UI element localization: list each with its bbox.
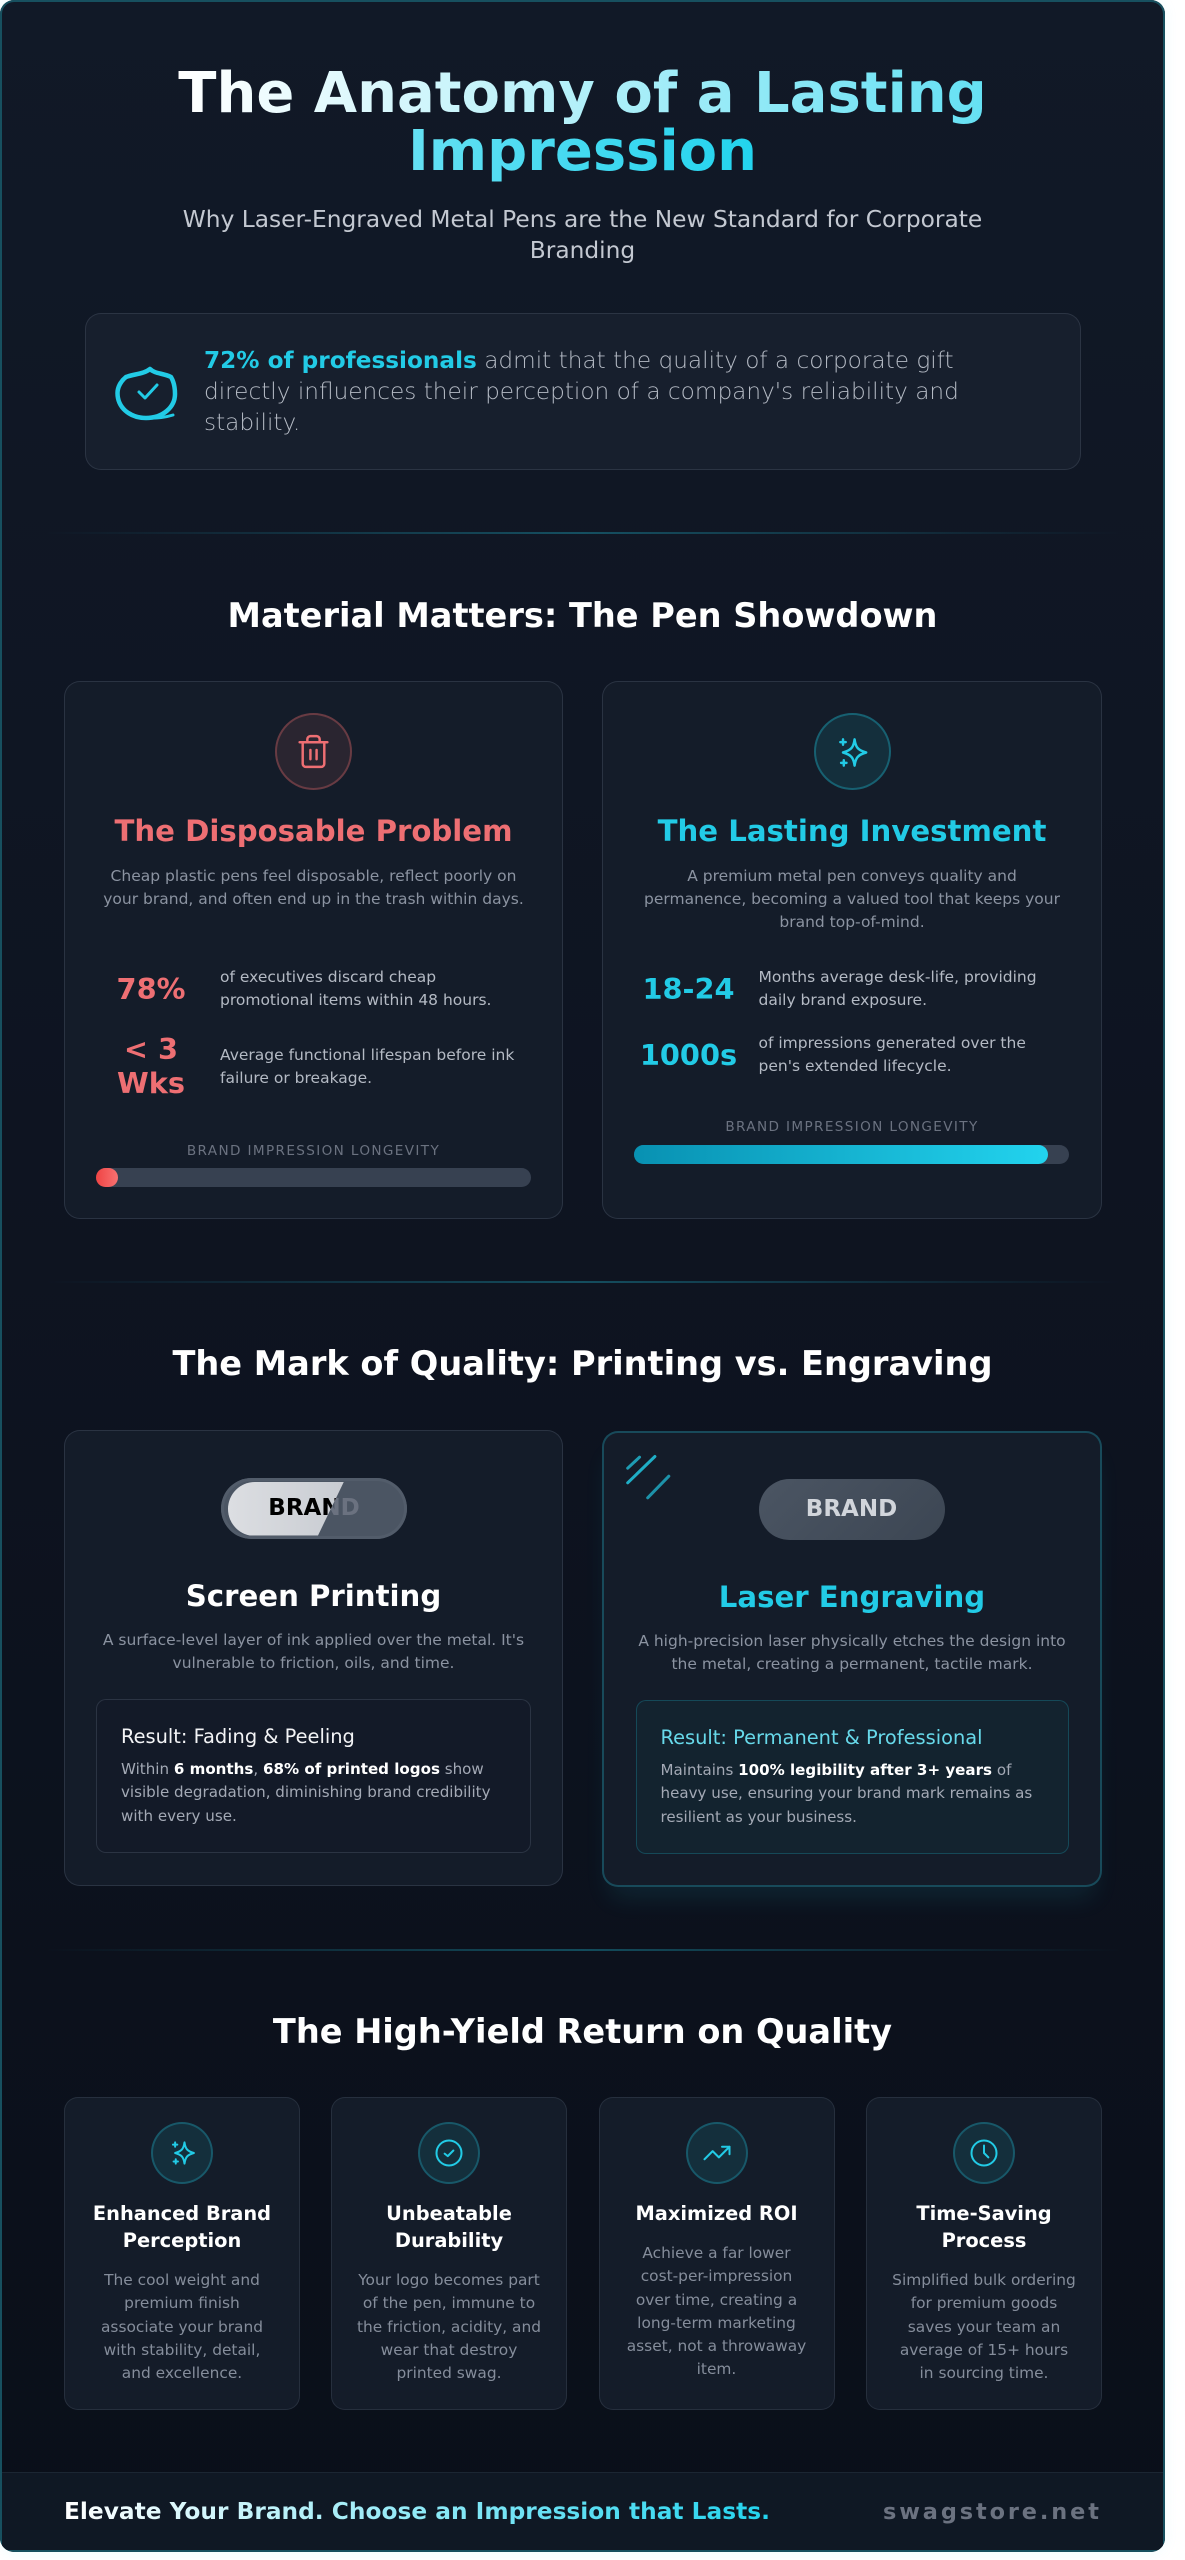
result text: with every use.: [121, 1807, 237, 1825]
card text: [101, 2271, 263, 2382]
subtitle: Branding: [530, 237, 635, 264]
panel: maximized ROI: [598, 2097, 834, 2410]
card heading: Process: [942, 2229, 1026, 2252]
stat: 78%: [117, 968, 491, 1009]
subtitle: Why Laser-Engraved Metal Pens are the New Standard for Corporate: [183, 206, 982, 233]
card text: and excellence.: [122, 2364, 242, 2382]
card text: [892, 2271, 1076, 2382]
stat text: failure or breakage.: [220, 1069, 372, 1087]
card description: your brand, and often end up in the trash within days.: [103, 890, 524, 908]
card description: [103, 1631, 524, 1672]
panel: the lasting investment: [602, 681, 1102, 1219]
longevity bar: [634, 1144, 1069, 1164]
subtitle: [183, 206, 982, 264]
icon: clock: [953, 2122, 1015, 2184]
panel: key statistic callout: [85, 313, 1081, 470]
card description: A high-precision laser physically etches the design into: [638, 1632, 1066, 1650]
card text: Achieve a far lower: [642, 2244, 791, 2262]
card text: the friction, acidity, and: [357, 2318, 541, 2336]
result text: resilient as your business.: [660, 1808, 857, 1826]
card text: item.: [697, 2360, 736, 2378]
stat number: < 3: [124, 1032, 178, 1066]
card heading: Perception: [123, 2229, 241, 2252]
footer tagline: Elevate Your Brand. Choose an Impression that Lasts.: [64, 2498, 770, 2525]
card text: printed swag.: [396, 2364, 502, 2382]
stat text: Average functional lifespan before ink: [220, 1046, 514, 1064]
result box: [96, 1699, 531, 1853]
card heading: The Disposable Problem: [114, 814, 513, 848]
card description: brand top-of-mind.: [779, 913, 925, 931]
card description: Cheap plastic pens feel disposable, reflect poorly on: [111, 867, 516, 885]
card heading: Screen Printing: [186, 1579, 441, 1613]
card text: over time, creating a: [636, 2291, 797, 2309]
icon: trending up: [686, 2122, 748, 2184]
card text: for premium goods: [911, 2294, 1057, 2312]
card description: A surface-level layer of ink applied over the metal. It's: [103, 1631, 524, 1649]
stat text: [220, 1046, 514, 1087]
icon: shield check: [115, 366, 178, 420]
card description: [638, 1632, 1066, 1673]
graphic: worn printed logo pill: BRAND: [268, 1495, 360, 1521]
stat text: [758, 1034, 1026, 1075]
card description: permanence, becoming a valued tool that keeps your: [644, 890, 1060, 908]
panel: laser engraving: [602, 1430, 1102, 1886]
card heading: Maximized ROI: [635, 2202, 798, 2225]
longevity label: BRAND IMPRESSION LONGEVITY: [725, 1119, 979, 1135]
longevity label: BRAND IMPRESSION LONGEVITY: [187, 1143, 440, 1159]
card heading: Unbeatable: [386, 2202, 512, 2225]
stat: 1000s: [640, 1034, 1026, 1075]
card text: [357, 2271, 541, 2382]
callout text: [204, 347, 959, 436]
card description: [644, 867, 1060, 931]
title: [178, 60, 987, 184]
panel: time-saving process: [866, 2097, 1102, 2410]
card text: asset, not a throwaway: [627, 2337, 806, 2355]
panel: enhanced brand perception: [64, 2097, 300, 2410]
card description: [103, 867, 524, 908]
card text: long-term marketing: [637, 2314, 796, 2332]
card text: associate your brand: [101, 2318, 263, 2336]
callout text: 72% of professionals admit that the quality of a corporate gift: [204, 347, 954, 374]
result text: [660, 1761, 1032, 1826]
longevity bar: [96, 1168, 531, 1187]
stat number: Wks: [117, 1066, 185, 1100]
stat number: 1000s: [640, 1038, 737, 1072]
heading: mark of quality: The Mark of Quality: Printing vs. Engraving: [172, 1344, 992, 1383]
footer: [2, 2472, 1163, 2550]
icon: sparkles: [814, 713, 890, 790]
card text: premium finish: [124, 2294, 240, 2312]
panel: screen printing: [64, 1430, 563, 1886]
stat text: daily brand exposure.: [758, 991, 927, 1009]
result text: [121, 1760, 491, 1825]
result heading: Result: Fading & Peeling: [121, 1725, 355, 1748]
stat number: 18-24: [642, 972, 735, 1006]
card text: of the pen, immune to: [363, 2294, 535, 2312]
card heading: The Lasting Investment: [658, 814, 1046, 848]
card text: Your logo becomes part: [358, 2271, 540, 2289]
result text: visible degradation, diminishing brand credibility: [121, 1783, 491, 1801]
icon: trash: [275, 713, 352, 790]
card text: cost-per-impression: [641, 2267, 792, 2285]
card text: Simplified bulk ordering: [892, 2271, 1076, 2289]
panel: unbeatable durability: [331, 2097, 567, 2410]
result text: Maintains 100% legibility after 3+ years of: [660, 1761, 1011, 1779]
graphic: worn printed logo pill: BRAND: [268, 1495, 360, 1521]
card text: wear that destroy: [381, 2341, 517, 2359]
card text: average of 15+ hours: [900, 2341, 1068, 2359]
card heading: Time-Saving: [916, 2202, 1052, 2225]
stat number: [117, 1032, 185, 1100]
card heading: Laser Engraving: [719, 1580, 985, 1614]
graphic: worn printed logo pill: [221, 1478, 407, 1539]
card heading: [386, 2202, 512, 2252]
footer site name: swagstore.net: [883, 2499, 1102, 2525]
stat: 18-24: [642, 968, 1037, 1009]
stat: under 3 weeks: [117, 1032, 514, 1100]
card heading: Durability: [395, 2229, 503, 2252]
result text: Within 6 months, 68% of printed logos show: [121, 1760, 484, 1778]
stat text: of executives discard cheap: [220, 968, 436, 986]
stat text: of impressions generated over the: [758, 1034, 1026, 1052]
result text: heavy use, ensuring your brand mark remains as: [660, 1784, 1032, 1802]
card text: saves your team an: [908, 2318, 1060, 2336]
icon: sparkles: [151, 2122, 213, 2184]
callout text: directly influences their perception of a company's reliability and: [204, 378, 959, 405]
title: The Anatomy of a Lasting: [178, 60, 987, 126]
card heading: [916, 2202, 1052, 2252]
stat number: 78%: [117, 972, 185, 1006]
card heading: [93, 2202, 271, 2252]
heading: material matters: Material Matters: The Pen Showdown: [228, 596, 937, 635]
card text: with stability, detail,: [104, 2341, 260, 2359]
graphic: engraved logo pill: BRAND: [806, 1496, 897, 1522]
heading: high-yield return: The High-Yield Return on Quality: [273, 2012, 892, 2051]
icon: laser lines: [626, 1454, 670, 1500]
title: Impression: [408, 119, 757, 184]
card description: the metal, creating a permanent, tactile mark.: [671, 1655, 1033, 1673]
result box: [636, 1700, 1068, 1854]
stat text: pen's extended lifecycle.: [758, 1057, 952, 1075]
card description: A premium metal pen conveys quality and: [687, 867, 1017, 885]
callout text: stability.: [204, 409, 300, 436]
card heading: Enhanced Brand: [93, 2202, 271, 2225]
card text: in sourcing time.: [920, 2364, 1048, 2382]
graphic: engraved logo pill: [758, 1479, 944, 1540]
stat text: [220, 968, 491, 1009]
stat text: Months average desk-life, providing: [758, 968, 1037, 986]
result heading: Result: Permanent & Professional: [660, 1726, 983, 1749]
icon: check circle: [418, 2122, 480, 2184]
card text: [627, 2244, 806, 2378]
stat text: [758, 968, 1037, 1009]
stat text: promotional items within 48 hours.: [220, 991, 491, 1009]
card description: vulnerable to friction, oils, and time.: [173, 1654, 454, 1672]
card text: The cool weight and: [104, 2271, 260, 2289]
panel: the disposable problem: [64, 681, 563, 1219]
